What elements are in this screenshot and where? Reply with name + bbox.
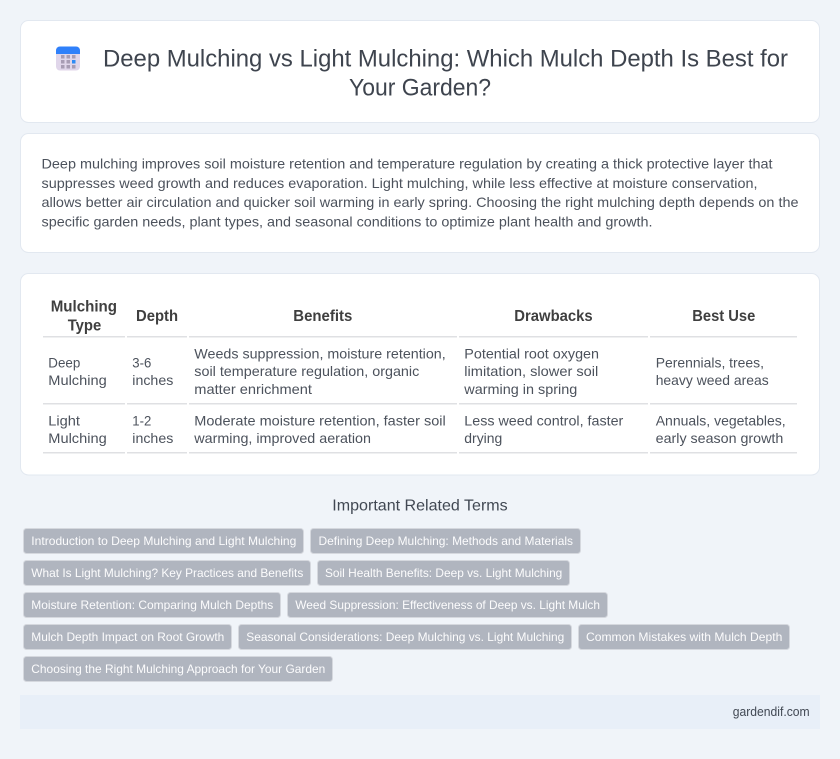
tag xyxy=(310,528,580,554)
tag: Defining Deep Mulching: Methods and Materials xyxy=(318,534,573,548)
table row: light mulching: Mulching xyxy=(48,430,107,446)
table row: deep mulching: Weeds suppression, moisture retention, xyxy=(194,345,446,361)
tag xyxy=(24,592,280,618)
table row: light mulching: 1-2 xyxy=(132,412,152,428)
table row: deep mulching: soil temperature regulation, organic xyxy=(194,363,419,379)
tag: Soil Health Benefits: Deep vs. Light Mulching xyxy=(325,566,562,580)
table row: deep mulching: Potential root oxygen xyxy=(464,345,599,361)
table row: light mulching: Light xyxy=(48,412,80,428)
table row: deep mulching: heavy weed areas xyxy=(656,372,769,388)
table row: deep mulching: limitation, slower soil xyxy=(464,363,598,379)
table row: deep mulching: Perennials, trees, xyxy=(656,354,764,370)
tag: Introduction to Deep Mulching and Light Mulching xyxy=(31,534,296,548)
table row: light mulching: Moderate moisture retention, faster soil xyxy=(194,412,446,428)
table header row: Drawbacks xyxy=(514,308,593,325)
panel: related term tags xyxy=(24,528,790,682)
tag: Common Mistakes with Mulch Depth xyxy=(586,630,782,644)
tag xyxy=(24,560,310,586)
table row: deep mulching: warming in spring xyxy=(463,381,577,397)
tag xyxy=(238,624,572,650)
tag xyxy=(24,656,332,682)
panel: introduction text xyxy=(20,134,820,252)
table row: deep mulching: 3-6 xyxy=(132,354,152,370)
tag: Seasonal Considerations: Deep Mulching vs. Light Mulching xyxy=(246,630,564,644)
footer bar xyxy=(20,695,820,729)
title xyxy=(103,46,788,102)
table header row: Depth xyxy=(136,308,178,325)
tag xyxy=(24,624,232,650)
text block: introduction paragraph: Deep mulching improves soil moisture retention and temperature regulation by creating a thick protective layer that xyxy=(42,156,773,172)
tag xyxy=(578,624,790,650)
title: Deep Mulching vs Light Mulching: Which Mulch Depth Is Best for xyxy=(103,46,788,72)
table header row: Mulching xyxy=(51,299,117,316)
text block: introduction paragraph: specific garden needs, plant types, and seasonal conditions to optimize plant health and growth. xyxy=(42,214,652,230)
table row: deep mulching: inches xyxy=(132,372,173,388)
table row: light mulching: Less weed control, faster xyxy=(464,412,624,428)
table header row: Type xyxy=(68,318,101,335)
title: Your Garden? xyxy=(349,74,491,102)
panel: comparison table xyxy=(20,274,820,475)
table row: light mulching xyxy=(43,412,797,454)
tag: Moisture Retention: Comparing Mulch Depths xyxy=(31,598,273,612)
table header row xyxy=(43,299,797,338)
text block: introduction paragraph: suppresses weed growth and reduces evaporation. Light mulching, while less effective at moisture conservation, xyxy=(42,175,758,191)
icon: calendar xyxy=(56,46,80,70)
tag: Mulch Depth Impact on Root Growth xyxy=(31,630,224,644)
table row: light mulching: warming, improved aeration xyxy=(193,430,371,446)
text block: introduction paragraph xyxy=(42,156,799,230)
table row: light mulching: drying xyxy=(464,430,502,446)
table row: deep mulching: Deep xyxy=(48,354,81,370)
tag: Choosing the Right Mulching Approach for Your Garden xyxy=(31,662,325,676)
footer site name: gardendif.com xyxy=(733,704,810,719)
heading: important related terms: Important Related Terms xyxy=(332,498,508,515)
table header row: Best Use xyxy=(692,308,755,325)
tag: What Is Light Mulching? Key Practices and Benefits xyxy=(31,566,303,580)
tag: Weed Suppression: Effectiveness of Deep vs. Light Mulch xyxy=(295,598,600,612)
table row: light mulching: early season growth xyxy=(656,430,783,446)
table row: deep mulching xyxy=(43,345,797,404)
panel: header xyxy=(20,20,820,122)
table header row: Benefits xyxy=(293,308,352,325)
table row: light mulching: Annuals, vegetables, xyxy=(656,412,786,428)
tag xyxy=(318,560,570,586)
tag xyxy=(288,592,608,618)
text block: introduction paragraph: allows better air circulation and quicker soil warming in early spring. Choosing the right mulching depth depends on the xyxy=(42,194,799,210)
table row: deep mulching: Mulching xyxy=(48,372,107,388)
table row: deep mulching: matter enrichment xyxy=(194,381,312,397)
table row: light mulching: inches xyxy=(132,430,173,446)
tag xyxy=(24,528,304,554)
